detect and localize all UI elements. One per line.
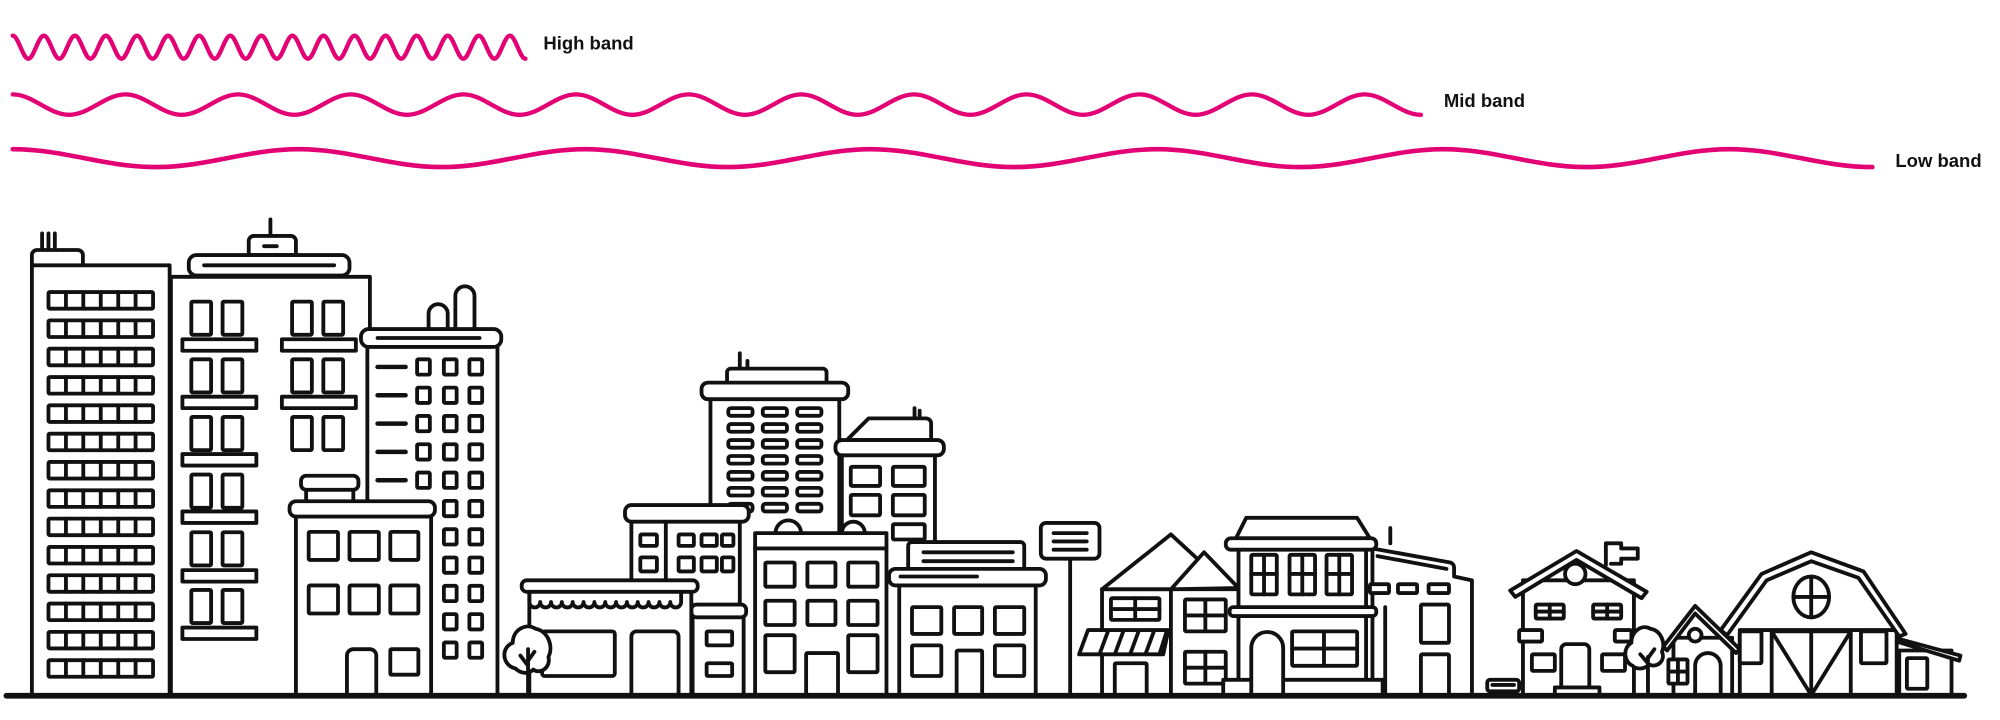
label: low band: Low band bbox=[1895, 150, 1982, 171]
sign post bbox=[1041, 523, 1099, 695]
house: small bbox=[1663, 606, 1740, 695]
label: mid band: Mid band bbox=[1444, 90, 1525, 111]
tree: right bbox=[1625, 627, 1663, 695]
mailbox bbox=[1487, 680, 1519, 691]
building: shopfront right bbox=[889, 542, 1046, 695]
ground line bbox=[6, 694, 1964, 698]
building: tall left tower bbox=[32, 233, 170, 695]
building: front center bbox=[755, 520, 886, 695]
wave: mid band bbox=[13, 94, 1421, 115]
building: second tower bbox=[171, 219, 370, 695]
building: shop with awning bbox=[522, 580, 698, 695]
cityscape bbox=[6, 219, 1964, 696]
building: front midrise bbox=[290, 476, 435, 695]
barn bbox=[1721, 552, 1906, 695]
building: office right bbox=[1370, 528, 1472, 695]
wave: low band bbox=[13, 149, 1872, 167]
house: double gable bbox=[1079, 534, 1239, 695]
building: tall mid tower bbox=[702, 353, 848, 695]
building: narrow side tower bbox=[691, 605, 746, 695]
building: right of mid tower bbox=[835, 408, 944, 695]
building: third tower bbox=[361, 286, 501, 695]
tree: left bbox=[504, 627, 550, 695]
house: ornate center bbox=[1223, 518, 1383, 695]
house: flag house bbox=[1510, 543, 1647, 695]
building: behind shop bbox=[625, 505, 749, 695]
wave: high band bbox=[13, 36, 525, 59]
shed bbox=[1897, 639, 1960, 695]
label: high band: High band bbox=[543, 33, 634, 54]
